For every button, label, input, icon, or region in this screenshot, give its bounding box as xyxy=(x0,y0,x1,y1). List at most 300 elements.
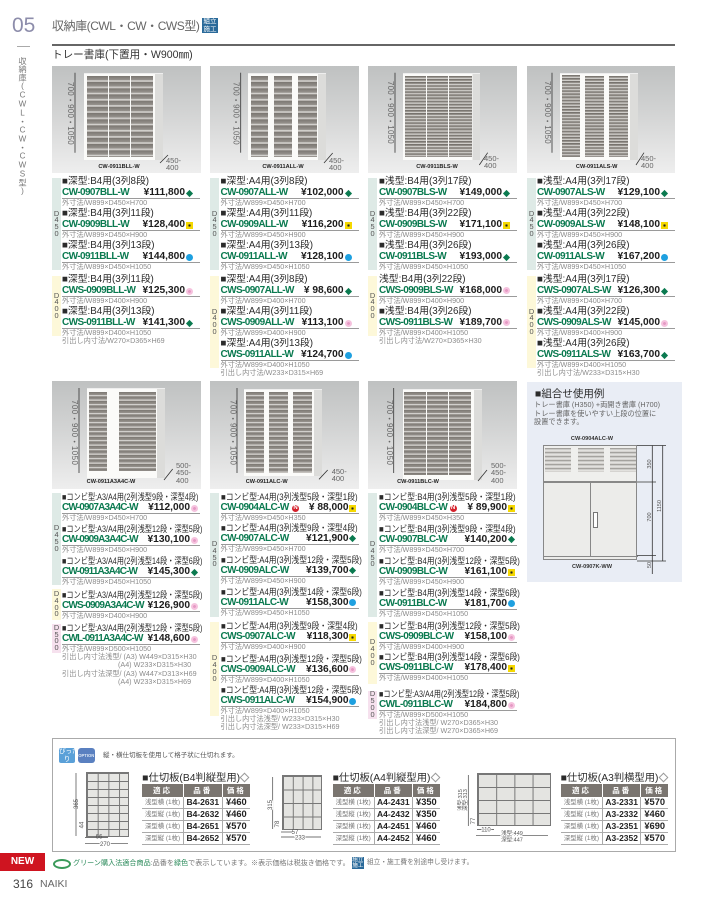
icon: assembly badge small: 施工 xyxy=(352,863,363,869)
product: CW-0907ALL-W: CW-0907ALL-W xyxy=(220,187,288,198)
footer assembly note: 組立・施工費を別途申し受けます。 xyxy=(367,859,473,866)
product: CWS-0907ALL-W xyxy=(220,274,359,305)
product: CWS-0907ALC-W xyxy=(220,621,359,651)
band: D500 column 1 lower: 0 xyxy=(54,636,59,645)
product column: B4 combination xyxy=(379,492,520,735)
panel: product photo CW-0911ALS-W xyxy=(527,66,675,173)
table: A3 dividers: 浅型横 (1枚) xyxy=(564,799,599,806)
dimensions: A4 divider: 315 xyxy=(268,799,274,810)
product: CWS-0907ALL-W: ■深型:A4用(3列8段) xyxy=(220,274,308,285)
panel: product photo CW-0911BLC-W: 500- 450- 400 xyxy=(491,461,506,485)
product: CWS-0907ALS-W xyxy=(537,274,675,305)
table: A3 dividers: A3-2331 xyxy=(605,797,638,807)
product: CWL-0911A3A4C-W: 引出し内寸法浅型/ (A3) W449×D315×H30 xyxy=(62,652,197,661)
table: A3 dividers: A3-2332 xyxy=(605,809,638,819)
dimensions: A4 divider: 78 xyxy=(275,820,281,827)
icon: assembly badge small xyxy=(352,857,364,869)
product: CWS-0911BLC-W: 外寸法/W899×D400×H1050 xyxy=(379,673,468,682)
product: CWS-0909BLS-W: 外寸法/W899×D400×H900 xyxy=(379,296,464,304)
usage description: トレー書庫 (H350) +両開き書庫 (H700) xyxy=(534,400,660,409)
product: CWS-0911BLL-W: 外寸法/W899×D400×H1050 xyxy=(62,328,151,337)
table: A4 dividers: ¥460 xyxy=(416,821,437,831)
product: CWS-0911BLC-W: ¥178,400 xyxy=(464,662,507,673)
table: A4 dividers: A4-2431 xyxy=(377,797,410,807)
product: CW-0911ALC-W: 外寸法/W899×D450×H1050 xyxy=(220,608,310,617)
table: B4 dividers: 価格 xyxy=(227,786,246,795)
band: D400 column 1: 4 xyxy=(54,297,59,306)
product: CWS-0909BLC-W: 外寸法/W899×D400×H900 xyxy=(379,642,464,651)
dimensions: A3 divider: 浅型:449 xyxy=(501,829,523,837)
band: D400 column 4: D xyxy=(529,307,534,316)
product: CW-0904BLC-W: ¥ 89,900 xyxy=(467,502,507,513)
product: CWS-0911BLS-W: 引出し内寸法/W270×D365×H30 xyxy=(379,336,482,345)
product: CWS-0909BLL-W xyxy=(62,274,200,305)
product: CW-0909BLL-W: 外寸法/W899×D450×H900 xyxy=(62,230,147,239)
band: D450 column 1 lower: 5 xyxy=(54,537,59,546)
product: CWS-0909ALL-W: 外寸法/W899×D400×H900 xyxy=(220,328,306,337)
product: CW-0909ALL-W: CW-0909ALL-W xyxy=(220,219,288,230)
band: D400 column 1 lower: 0 xyxy=(54,602,59,612)
band: D400 column 1 lower: D xyxy=(54,589,59,598)
product: CW-0911BLS-W: ¥193,000 xyxy=(460,251,502,262)
product: CWS-0909BLS-W: CWS-0909BLS-W xyxy=(379,284,453,296)
panel: product photo CW-0911ALS-W: CW-0911ALS-W xyxy=(576,164,617,170)
product: CWS-0911BLL-W xyxy=(62,306,200,345)
product: CW-0909BLS-W: ■浅型:B4用(3列22段) xyxy=(379,208,471,219)
option note: 縦・横仕切板を使用して格子状に仕切れます。 xyxy=(103,752,239,759)
band: D450 column 1 lower: 0 xyxy=(54,544,59,553)
product: CW-0909BLC-W: CW-0909BLC-W xyxy=(379,566,447,577)
product: CWL-0911BLC-W: 引出し内寸法浅型/ W270×D365×H30 xyxy=(379,718,498,727)
product: CW-0911BLL-W: ¥144,800 xyxy=(142,251,185,262)
band: D450 column 3 lower: 5 xyxy=(370,553,375,562)
dimensions: B4 divider: 66 xyxy=(96,834,103,840)
product: CW-0909ALS-W: 外寸法/W899×D450×H900 xyxy=(537,230,622,239)
product: CW-0907ALC-W: ¥121,900 xyxy=(306,533,348,544)
icon: assembly badge: 施工 xyxy=(204,26,216,32)
band: D450 column 1 lower: D xyxy=(54,523,59,532)
product: CW-0909A3A4C-W: CW-0909A3A4C-W xyxy=(62,534,138,545)
panel: product photo CW-0911A3A4C-W: 700・900・1050 xyxy=(70,400,79,465)
product: CW-0909ALL-W xyxy=(220,208,359,239)
band: D400 column 4: 0 xyxy=(529,327,534,336)
product: CW-0907ALS-W: ¥129,100 xyxy=(618,187,660,198)
band: D400 column 3: D xyxy=(370,291,375,300)
icon: pittari badge xyxy=(59,748,75,763)
band: D500 column 3 lower: D xyxy=(370,689,375,698)
band: D450 column 1 lower xyxy=(52,493,61,585)
table: A4 dividers: A4-2452 xyxy=(377,833,410,843)
table: B4 dividers xyxy=(142,784,250,845)
band: D400 column 3 lower: 4 xyxy=(370,644,375,653)
panel: product photo CW-0911ALS-W: 700・900・1050 xyxy=(543,81,552,144)
product: CW-0904BLC-W xyxy=(379,492,517,522)
product: CWS-0911BLS-W: ■浅型:B4用(3列26段) xyxy=(379,306,471,316)
panel: product photo CW-0911ALL-W xyxy=(210,66,359,173)
product: CWS-0909A3A4C-W: CWS-0909A3A4C-W xyxy=(62,600,144,611)
product: CWS-0907ALL-W: CWS-0907ALL-W xyxy=(220,285,294,296)
heading: A4 divider: ■仕切板(A4判縦型用) xyxy=(333,773,430,784)
product: CWS-0909ALS-W xyxy=(537,306,675,337)
dimension annotations: 1150 xyxy=(657,500,663,511)
product: CW-0911ALC-W xyxy=(220,587,362,617)
band: D400 column 3: 0 xyxy=(370,311,375,320)
page number: 316 xyxy=(13,877,33,891)
panel: product photo CW-0911A3A4C-W: 500- 450- 400 xyxy=(176,461,191,485)
band: D450 column 2 lower xyxy=(210,493,219,617)
product: CW-0909BLL-W: ■深型:B4用(3列11段) xyxy=(62,208,154,219)
panel: product photo CW-0911BLL-W: CW-0911BLL-W xyxy=(98,164,140,170)
icon: diamond xyxy=(240,773,250,783)
table: B4 dividers: 適応 xyxy=(153,786,172,795)
product: CW-0909BLL-W: ¥128,400 xyxy=(142,219,185,230)
band: D450 column 3: D xyxy=(370,209,375,218)
product: CWS-0911ALS-W: 引出し内寸法/W233×D315×H30 xyxy=(537,368,640,377)
product: CWS-0911BLL-W: CWS-0911BLL-W xyxy=(62,317,135,328)
panel: product photo CW-0911BLC-W: 700・900・1050 xyxy=(385,400,394,465)
product: CW-0911ALC-W: ■コンビ型:A4用(3列浅型14段・深型6段) xyxy=(220,587,361,597)
product: CW-0909ALL-W: ■深型:A4用(3列11段) xyxy=(220,208,312,219)
product column: A3/A4 combination xyxy=(62,492,202,686)
product: CW-0911BLC-W: CW-0911BLC-W xyxy=(379,598,447,609)
product: CW-0911ALC-W: ¥158,300 xyxy=(306,597,348,608)
product: CWS-0907ALL-W: ¥ 98,600 xyxy=(304,285,344,296)
product: CW-0904ALC-W: N xyxy=(293,504,298,510)
table: A4 dividers: ¥460 xyxy=(416,833,437,843)
product: CWS-0909BLS-W xyxy=(379,274,517,304)
product: CWS-0911BLL-W: 引出し内寸法/W270×D365×H69 xyxy=(62,336,165,345)
product: CWS-0909ALL-W xyxy=(220,306,359,337)
product: CW-0907ALL-W: 外寸法/W899×D450×H700 xyxy=(220,198,306,207)
panel: product photo CW-0911ALL-W: 450- 400 xyxy=(329,156,344,172)
band: D500 column 1 lower: 5 xyxy=(54,630,59,639)
band: D450 column 2 lower: 0 xyxy=(212,559,217,568)
band: D500 column 1 lower: D xyxy=(54,623,59,632)
band: D400 column 1 lower: 4 xyxy=(54,596,59,605)
table: A4 dividers: 深型縦 (1枚) xyxy=(336,835,371,842)
panel: product photo CW-0911ALL-W: CW-0911ALL-W xyxy=(262,164,304,170)
product: CW-0909BLS-W: CW-0909BLS-W xyxy=(379,219,447,230)
table: B4 dividers: B4-2632 xyxy=(186,809,219,819)
product: CWL-0911A3A4C-W: CWL-0911A3A4C-W xyxy=(62,633,143,644)
dimensions: A3 divider: 深型:447 xyxy=(501,836,523,844)
product: CW-0904BLC-W: 外寸法/W899×D450×H350 xyxy=(379,513,464,522)
product: CW-0909BLL-W xyxy=(62,208,200,239)
upper tray cabinet xyxy=(543,445,637,482)
band: D400 column 3 lower: D xyxy=(370,637,375,646)
product: CW-0904BLC-W: N xyxy=(451,504,455,510)
panel: product photo CW-0911A3A4C-W: CW-0911A3A4C-W xyxy=(87,479,135,485)
product: CWS-0911ALC-W: ¥154,900 xyxy=(306,695,348,706)
product: CWS-0909BLS-W: ¥168,000 xyxy=(460,284,502,296)
table: A4 dividers: 浅型横 (1枚) xyxy=(336,799,371,806)
product: CWS-0909BLC-W: CWS-0909BLC-W xyxy=(379,631,453,642)
band: D450 column 1: 4 xyxy=(54,215,59,224)
product: CW-0909BLL-W: CW-0909BLL-W xyxy=(62,219,129,230)
product: CWS-0911ALS-W: ■浅型:A4用(3列26段) xyxy=(537,338,629,349)
product: CWS-0909ALC-W xyxy=(220,654,362,684)
product: CWS-0909BLC-W xyxy=(379,619,517,651)
product: CWS-0911ALS-W: ¥163,700 xyxy=(618,349,660,360)
product: CWS-0909ALS-W: ■浅型:A4用(3列22段) xyxy=(537,306,629,317)
product: CW-0907BLL-W: 外寸法/W899×D450×H700 xyxy=(62,198,147,207)
product: CW-0909ALC-W: CW-0909ALC-W xyxy=(220,565,289,576)
product: CW-0907ALC-W: CW-0907ALC-W xyxy=(220,533,289,544)
lower cabinet label: CW-0907K-WW xyxy=(572,564,612,570)
band: D450 column 3 lower: 4 xyxy=(370,546,375,555)
product: CW-0911BLS-W: ■浅型:B4用(3列26段) xyxy=(379,240,471,251)
band: D450 column 3 xyxy=(368,178,377,270)
product: CWS-0911BLC-W xyxy=(379,650,517,682)
product: CWL-0911A3A4C-W: 引出し内寸法深型/ (A3) W447×D313×H69 xyxy=(62,669,197,678)
band: D450 column 2 lower: 4 xyxy=(212,546,217,555)
product: CW-0911BLC-W: ■コンビ型:B4用(3列浅型14段・深型6段) xyxy=(379,588,520,598)
band: D500 column 3 lower: 0 xyxy=(370,703,375,712)
table: A4 dividers: 適応 xyxy=(344,786,363,795)
band: D450 column 1: D xyxy=(54,209,59,218)
product: CW-0907BLS-W xyxy=(379,176,517,207)
band: D450 column 2: 4 xyxy=(212,215,217,224)
product: CWL-0911A3A4C-W: 外寸法/W899×D500×H1050 xyxy=(62,644,151,653)
product: CWS-0911ALL-W: 引出し内寸法/W233×D315×H69 xyxy=(220,368,323,377)
panel: product photo CW-0911ALC-W: CW-0911ALC-W xyxy=(246,479,288,485)
product: CW-0911ALC-W: CW-0911ALC-W xyxy=(220,597,288,608)
footer note: グリーン購入法適合商品:品番を緑色で表示しています。※表示価格は税抜き価格です。 xyxy=(73,859,350,867)
product: CW-0911ALL-W: ■深型:A4用(3列13段) xyxy=(220,240,313,251)
icon: option badge xyxy=(78,748,95,763)
table: A3 dividers: 浅型縦 (1枚) xyxy=(564,811,599,818)
product: CW-0907BLC-W: ■コンビ型:B4用(3列浅型9段・深型4段) xyxy=(379,524,516,534)
product: CWS-0911BLC-W: CWS-0911BLC-W xyxy=(379,662,453,673)
product: CW-0911ALL-W xyxy=(220,240,359,271)
panel: product photo CW-0911BLL-W: 450- 400 xyxy=(166,156,181,172)
product: CWS-0911ALC-W: 外寸法/W899×D400×H1050 xyxy=(220,706,310,715)
product: CW-0907BLL-W: ¥111,800 xyxy=(144,187,185,198)
product: CW-0909A3A4C-W: ■コンビ型:A3/A4用(2列浅型12段・深型5段) xyxy=(62,524,202,534)
band: D450 column 4: 0 xyxy=(529,229,534,238)
sidebar dash xyxy=(17,46,30,47)
product: CWS-0909BLC-W: ¥158,100 xyxy=(464,631,507,642)
product: CWS-0907ALS-W: 外寸法/W899×D400×H700 xyxy=(537,296,622,305)
product: CW-0907A3A4C-W xyxy=(62,492,200,522)
product: CWS-0909ALS-W: CWS-0909ALS-W xyxy=(537,317,611,328)
icon: pittari badge: ぴった xyxy=(59,748,78,755)
panel: product photo CW-0911ALL-W: 700・900・1050 xyxy=(232,82,240,145)
product: CW-0911BLC-W: ¥181,700 xyxy=(464,598,507,609)
table: A4 dividers xyxy=(333,784,440,845)
product: CW-0911BLS-W xyxy=(379,240,517,271)
product: CW-0907BLS-W: CW-0907BLS-W xyxy=(379,187,447,198)
band: D450 column 2 lower: D xyxy=(212,539,217,548)
product: CWS-0911ALS-W xyxy=(537,338,675,377)
panel: product photo CW-0911ALC-W: 450- 400 xyxy=(332,467,347,483)
band: D400 column 1: 0 xyxy=(54,311,59,320)
table: A3 dividers: 深型横 (1枚) xyxy=(564,823,599,830)
product: CWS-0909BLL-W: 外寸法/W899×D400×H900 xyxy=(62,296,147,305)
band: D450 column 1: 0 xyxy=(54,229,59,238)
table: A3 dividers: ¥570 xyxy=(644,797,665,807)
table: B4 dividers: B4-2651 xyxy=(186,821,219,831)
band: D500 column 1 lower xyxy=(52,624,61,653)
product: CW-0907ALC-W: ■コンビ型:A4用(3列浅型9段・深型4段) xyxy=(220,523,357,533)
panel: product photo CW-0911ALC-W xyxy=(210,381,359,488)
product: CW-0907A3A4C-W: 外寸法/W899×D450×H700 xyxy=(62,513,147,522)
band: D450 column 1: 5 xyxy=(54,222,59,231)
product: CW-0909BLC-W xyxy=(379,554,517,586)
diagram: A3 divider xyxy=(477,773,551,826)
table: A4 dividers: 浅型縦 (1枚) xyxy=(336,811,371,818)
product: CWS-0911BLL-W: ■深型:B4用(3列13段) xyxy=(62,306,154,317)
product: CW-0911BLC-W xyxy=(379,586,517,618)
product: CW-0907BLC-W: CW-0907BLC-W xyxy=(379,534,447,545)
product: CWS-0909BLL-W: ■深型:B4用(3列11段) xyxy=(62,274,154,285)
section heading: トレー書庫(下置用・W900㎜) xyxy=(52,49,193,61)
band: D450 column 1 xyxy=(52,178,61,270)
product: CWL-0911BLC-W: ¥184,800 xyxy=(464,699,507,710)
band: D400 column 2: 0 xyxy=(212,320,217,329)
product: CW-0911BLS-W: CW-0911BLS-W xyxy=(379,251,446,262)
table: B4 dividers: 深型縦 (1枚) xyxy=(145,835,180,842)
product: CW-0909ALC-W: 外寸法/W899×D450×H900 xyxy=(220,576,306,585)
band: D400 column 2: 4 xyxy=(212,313,217,322)
band: D450 column 3: 0 xyxy=(370,229,375,238)
band: D400 column 1: D xyxy=(54,291,59,300)
product: CW-0909A3A4C-W: ¥130,100 xyxy=(148,534,190,545)
table: B4 dividers: 深型横 (1枚) xyxy=(145,823,180,830)
product: CW-0911BLL-W xyxy=(62,240,200,271)
panel: product photo CW-0911BLS-W: 700・900・1050 xyxy=(386,81,395,144)
product: CW-0904ALC-W xyxy=(220,492,359,522)
product: CWS-0909ALL-W: ■深型:A4用(3列11段) xyxy=(220,306,312,317)
product: CW-0907ALC-W xyxy=(220,523,359,553)
product: CW-0907ALL-W: ■深型:A4用(3列8段) xyxy=(220,176,308,187)
product: CWS-0909ALC-W: ¥136,600 xyxy=(306,664,348,675)
band: D450 column 4: D xyxy=(529,209,534,218)
product: CW-0904BLC-W: CW-0904BLC-W xyxy=(379,502,447,513)
table: A4 dividers: 価格 xyxy=(417,786,436,795)
table: B4 dividers: B4-2652 xyxy=(186,833,219,843)
panel: product photo CW-0911ALS-W: 450- 400 xyxy=(641,154,656,170)
table: A3 dividers: 深型縦 (1枚) xyxy=(564,835,599,842)
sidebar vertical label: 収納庫(CWL・CW・CWS型) xyxy=(18,57,27,196)
product: CW-0909BLC-W: ■コンビ型:B4用(3列浅型12段・深型5段) xyxy=(379,556,520,566)
product: CW-0907BLC-W: ¥140,200 xyxy=(464,534,507,545)
band: D400 column 1: 0 xyxy=(54,304,59,313)
usage description: トレー書庫を使いやすい上段の位置に xyxy=(534,409,656,418)
band: D400 column 3 lower: 0 xyxy=(370,658,375,667)
product: CWS-0909A3A4C-W xyxy=(62,590,202,620)
table: A4 dividers: 深型横 (1枚) xyxy=(336,823,371,830)
product: CW-0911BLL-W: ■深型:B4用(3列13段) xyxy=(62,240,154,251)
product: CW-0911A3A4C-W: CW-0911A3A4C-W xyxy=(62,566,137,577)
panel: product photo CW-0911BLS-W: 450- 400 xyxy=(484,154,499,170)
product: CWS-0911BLS-W: CWS-0911BLS-W xyxy=(379,316,452,328)
product: CW-0909BLS-W xyxy=(379,208,517,239)
panel: product photo CW-0911BLC-W xyxy=(368,381,517,488)
table: A4 dividers: ¥350 xyxy=(416,809,437,819)
product: CWS-0911ALS-W: 外寸法/W899×D400×H1050 xyxy=(537,360,626,369)
band: D400 column 4: 4 xyxy=(529,313,534,322)
band: D400 column 1 lower xyxy=(52,589,61,620)
product: CW-0907BLC-W: 外寸法/W899×D450×H700 xyxy=(379,545,464,554)
product: CW-0907ALL-W xyxy=(220,176,359,207)
product: CWS-0907ALS-W: ■浅型:A4用(3列17段) xyxy=(537,274,629,285)
product: CW-0909ALC-W xyxy=(220,555,362,585)
section number: 05 xyxy=(12,14,35,37)
product: CWS-0911ALL-W: CWS-0911ALL-W xyxy=(220,349,293,360)
heading: B4 divider: ■仕切板(B4判縦型用) xyxy=(142,773,240,784)
band: D450 column 3 lower: D xyxy=(370,539,375,548)
dimensions: A3 divider: 浅型:315 xyxy=(456,789,464,811)
band: D450 column 3 lower xyxy=(368,493,377,617)
product: CWS-0907ALS-W: ¥126,300 xyxy=(618,285,660,296)
product: CW-0907ALC-W: 外寸法/W899×D450×H700 xyxy=(220,544,306,553)
panel: product photo CW-0911BLL-W xyxy=(52,66,201,173)
icon: option badge: OPTION xyxy=(78,753,94,758)
product: CW-0911ALS-W xyxy=(537,240,675,271)
product: CW-0909A3A4C-W: 外寸法/W899×D450×H900 xyxy=(62,545,147,554)
band: D400 column 4 xyxy=(527,276,536,368)
product: CWL-0911A3A4C-W: ¥148,600 xyxy=(148,633,190,644)
product: CW-0907BLL-W: ■深型:B4用(3列8段) xyxy=(62,176,149,187)
product: CWS-0911ALL-W xyxy=(220,338,359,377)
band: D500 column 1 lower: 0 xyxy=(54,643,59,652)
band: D500 column 3 lower: 5 xyxy=(370,696,375,705)
product: CWS-0909A3A4C-W: 外寸法/W899×D400×H900 xyxy=(62,611,147,620)
product: CW-0904ALC-W: 外寸法/W899×D450×H350 xyxy=(220,513,306,522)
product: CW-0909ALS-W: ¥148,100 xyxy=(618,219,660,230)
product: CWL-0911BLC-W: 引出し内寸法深型/ W270×D365×H69 xyxy=(379,726,498,735)
band: D450 column 4: 4 xyxy=(529,215,534,224)
product column: A4 combination xyxy=(220,492,362,731)
band: D400 column 2 lower: D xyxy=(212,653,217,662)
table: A3 dividers xyxy=(561,784,668,845)
icon: diamond xyxy=(430,773,440,783)
dimension annotations: 700 xyxy=(647,512,653,521)
product: CWS-0909A3A4C-W: ¥126,900 xyxy=(148,600,190,611)
product: CWS-0909BLC-W: ■コンビ型:B4用(3列浅型12段・深型5段) xyxy=(379,621,520,631)
dimensions: B4 divider: 270 xyxy=(100,842,111,848)
product: CW-0907BLS-W: ¥149,000 xyxy=(460,187,502,198)
panel: product photo CW-0911A3A4C-W xyxy=(52,381,201,488)
band: D400 column 3 lower xyxy=(368,622,377,684)
panel: option dividers xyxy=(52,738,676,852)
product: CW-0911ALL-W: 外寸法/W899×D450×H1050 xyxy=(220,262,310,271)
product: CWS-0911ALL-W: ■深型:A4用(3列13段) xyxy=(220,338,313,349)
product: CW-0909BLS-W: 外寸法/W899×D450×H900 xyxy=(379,230,464,239)
table: A3 dividers: ¥690 xyxy=(644,821,665,831)
product: CW-0907BLC-W xyxy=(379,522,517,554)
product: CWS-0911BLS-W xyxy=(379,306,517,345)
header rule xyxy=(52,44,675,46)
product: CW-0909ALS-W xyxy=(537,208,675,239)
dimension annotations: 50 xyxy=(647,561,653,568)
product: CW-0909ALL-W: 外寸法/W899×D450×H900 xyxy=(220,230,306,239)
panel: combination usage example xyxy=(527,382,682,582)
table: A3 dividers: A3-2351 xyxy=(605,821,638,831)
product: CWS-0909ALC-W: ■コンビ型:A4用(3列浅型12段・深型5段) xyxy=(220,654,361,664)
product: CWS-0911ALC-W: CWS-0911ALC-W xyxy=(220,695,294,706)
product: CW-0904ALC-W: ¥ 88,000 xyxy=(309,502,348,513)
product: CW-0909ALS-W: ■浅型:A4用(3列22段) xyxy=(537,208,629,219)
product: CW-0904ALC-W: CW-0904ALC-W xyxy=(220,502,289,513)
band: D450 column 2 xyxy=(210,178,219,270)
product: CWS-0911BLL-W: ¥141,300 xyxy=(142,317,185,328)
product: CW-0911ALS-W: 外寸法/W899×D450×H1050 xyxy=(537,262,626,271)
product: CWS-0911ALC-W: 引出し内寸法浅型/ W233×D315×H30 xyxy=(220,714,340,723)
diagram: B4 divider xyxy=(86,772,129,837)
product: CWS-0907ALC-W: ¥118,300 xyxy=(307,631,348,642)
